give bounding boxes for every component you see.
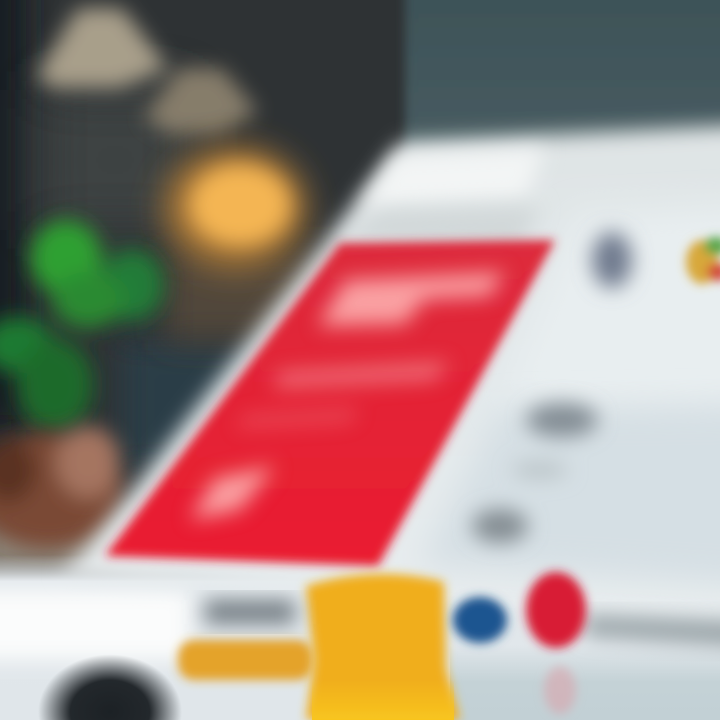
orange glow: lamp <box>163 146 307 270</box>
panel: red document <box>105 240 555 566</box>
blue object <box>453 597 507 643</box>
table: white surface <box>0 555 720 720</box>
tablet icons <box>472 232 632 543</box>
lamps: pendant lights <box>36 8 258 134</box>
red document text marks <box>190 272 505 520</box>
tablet: white device <box>60 124 720 648</box>
pot: brown planter <box>0 426 124 548</box>
dark reflections on table <box>205 600 295 624</box>
yellow object: gavel block <box>178 574 460 720</box>
red object <box>526 572 586 714</box>
multicolor chart icon <box>686 237 720 284</box>
plant: green leaves <box>0 220 164 431</box>
